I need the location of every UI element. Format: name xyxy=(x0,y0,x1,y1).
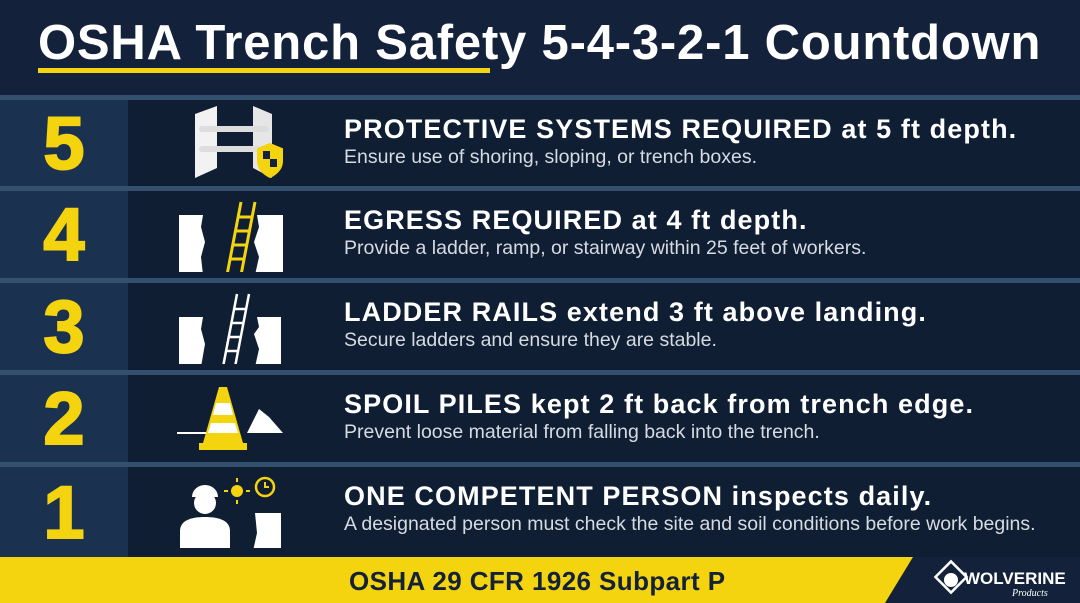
icon: competent person xyxy=(180,476,281,548)
row 4 xyxy=(0,191,1080,278)
row 3: 3 xyxy=(43,285,85,368)
text 5: PROTECTIVE SYSTEMS REQUIRED at 5 ft depth. xyxy=(344,114,1017,144)
row 5 xyxy=(0,100,1080,186)
row 2 xyxy=(0,375,1080,462)
icon: ladder egress xyxy=(179,202,283,272)
text 2 xyxy=(344,389,974,443)
text 3: LADDER RAILS extend 3 ft above landing. xyxy=(344,297,927,327)
icon: cone and spoil pile xyxy=(177,387,283,450)
footer banner: OSHA 29 CFR 1926 Subpart P xyxy=(349,566,725,596)
row 3 xyxy=(0,283,1080,370)
text 2: SPOIL PILES kept 2 ft back from trench edge. xyxy=(344,389,974,419)
footer banner xyxy=(0,557,913,603)
text 5: Ensure use of shoring, sloping, or trench boxes. xyxy=(344,146,757,168)
logo: WOLVERINE xyxy=(964,569,1066,588)
icon: shoring xyxy=(195,106,283,178)
row 4: 4 xyxy=(43,193,85,276)
logo xyxy=(934,560,1066,599)
text 5 xyxy=(344,114,1017,168)
text 3 xyxy=(344,297,927,351)
row 5: 5 xyxy=(43,102,85,184)
text 4: EGRESS REQUIRED at 4 ft depth. xyxy=(344,205,808,235)
text 1: ONE COMPETENT PERSON inspects daily. xyxy=(344,481,932,511)
row 1: 1 xyxy=(43,470,85,554)
text 3: Secure ladders and ensure they are stable. xyxy=(344,329,717,351)
logo: Products xyxy=(1011,588,1048,599)
title: OSHA Trench Safety 5-4-3-2-1 Countdown xyxy=(38,16,1041,70)
text 4: Provide a ladder, ramp, or stairway within 25 feet of workers. xyxy=(344,237,866,259)
icon: ladder rails xyxy=(179,294,281,364)
text 4 xyxy=(344,205,866,259)
text 2: Prevent loose material from falling back into the trench. xyxy=(344,421,820,443)
row 2: 2 xyxy=(43,377,85,460)
text 1 xyxy=(344,481,1036,535)
row 1 xyxy=(0,467,1080,557)
text 1: A designated person must check the site and soil conditions before work begins. xyxy=(344,513,1036,535)
